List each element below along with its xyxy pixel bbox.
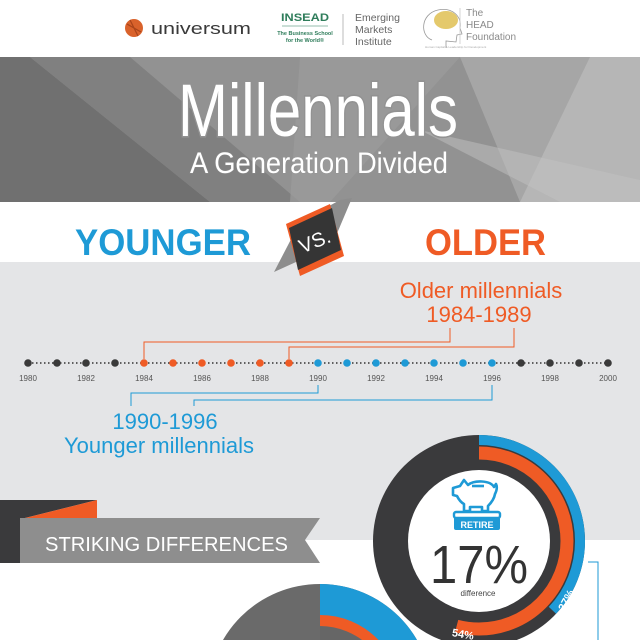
connector line: [588, 562, 598, 640]
vs ribbon: [274, 198, 352, 276]
logo: The HEAD Foundation: The: [466, 8, 484, 19]
donut 1: retire: RETIRE: [460, 520, 494, 530]
timeline: 1996: [483, 374, 501, 383]
logo: INSEAD: INSEAD: [281, 12, 329, 24]
younger bracket: [131, 385, 492, 406]
timeline: 2000: [599, 374, 617, 383]
timeline: 1980: [19, 374, 37, 383]
timeline: 1982: [77, 374, 95, 383]
timeline: 1990: [309, 374, 327, 383]
older label: 1984-1989: [426, 302, 532, 327]
logo: INSEAD: Emerging: [355, 12, 400, 24]
vs ribbon: VS.: [296, 226, 334, 258]
icon: piggy bank: [453, 480, 497, 511]
logo: universum: universum: [151, 19, 251, 38]
donut 1: retire: difference: [460, 589, 496, 598]
logo: The HEAD Foundation: Human Capital & Leadership for Development: [425, 45, 486, 49]
timeline: 1988: [251, 374, 269, 383]
older label: Older millennials: [400, 278, 562, 303]
subtitle: A Generation Divided: [190, 147, 448, 180]
donut 1: retire: 37%: [556, 588, 577, 613]
hero banner: [0, 57, 640, 202]
timeline: 1992: [367, 374, 385, 383]
younger label: Younger millennials: [64, 433, 254, 458]
older bracket: [144, 328, 514, 359]
logo: INSEAD: for the World®: [286, 37, 324, 44]
logo bar: [0, 0, 640, 57]
logo: INSEAD: Markets: [355, 24, 392, 36]
older label: [400, 278, 562, 327]
logo: The HEAD Foundation: [424, 8, 516, 49]
striking differences banner: STRIKING DIFFERENCES: [45, 534, 288, 556]
logo: The HEAD Foundation: HEAD: [466, 20, 494, 31]
younger label: 1990-1996: [112, 409, 218, 434]
stat 17%: 17%: [430, 535, 528, 595]
logo: INSEAD: [277, 12, 400, 48]
timeline: 1998: [541, 374, 559, 383]
logo: The HEAD Foundation: Foundation: [466, 32, 516, 43]
logo: INSEAD: Institute: [355, 36, 392, 48]
title: Millennials: [178, 69, 458, 152]
heading: YOUNGER: YOUNGER: [75, 222, 251, 263]
timeline: 1986: [193, 374, 211, 383]
heading: OLDER: OLDER: [425, 222, 546, 263]
striking differences banner: [0, 500, 320, 563]
donut 1: retire: [373, 435, 585, 640]
timeline: [19, 359, 617, 383]
younger label: [64, 409, 254, 458]
logo: universum: [125, 19, 251, 38]
logo: INSEAD: The Business School: [277, 31, 333, 37]
timeline: 1994: [425, 374, 443, 383]
timeline: 1984: [135, 374, 153, 383]
donut 2: [208, 584, 432, 640]
light gray section: [0, 262, 640, 540]
